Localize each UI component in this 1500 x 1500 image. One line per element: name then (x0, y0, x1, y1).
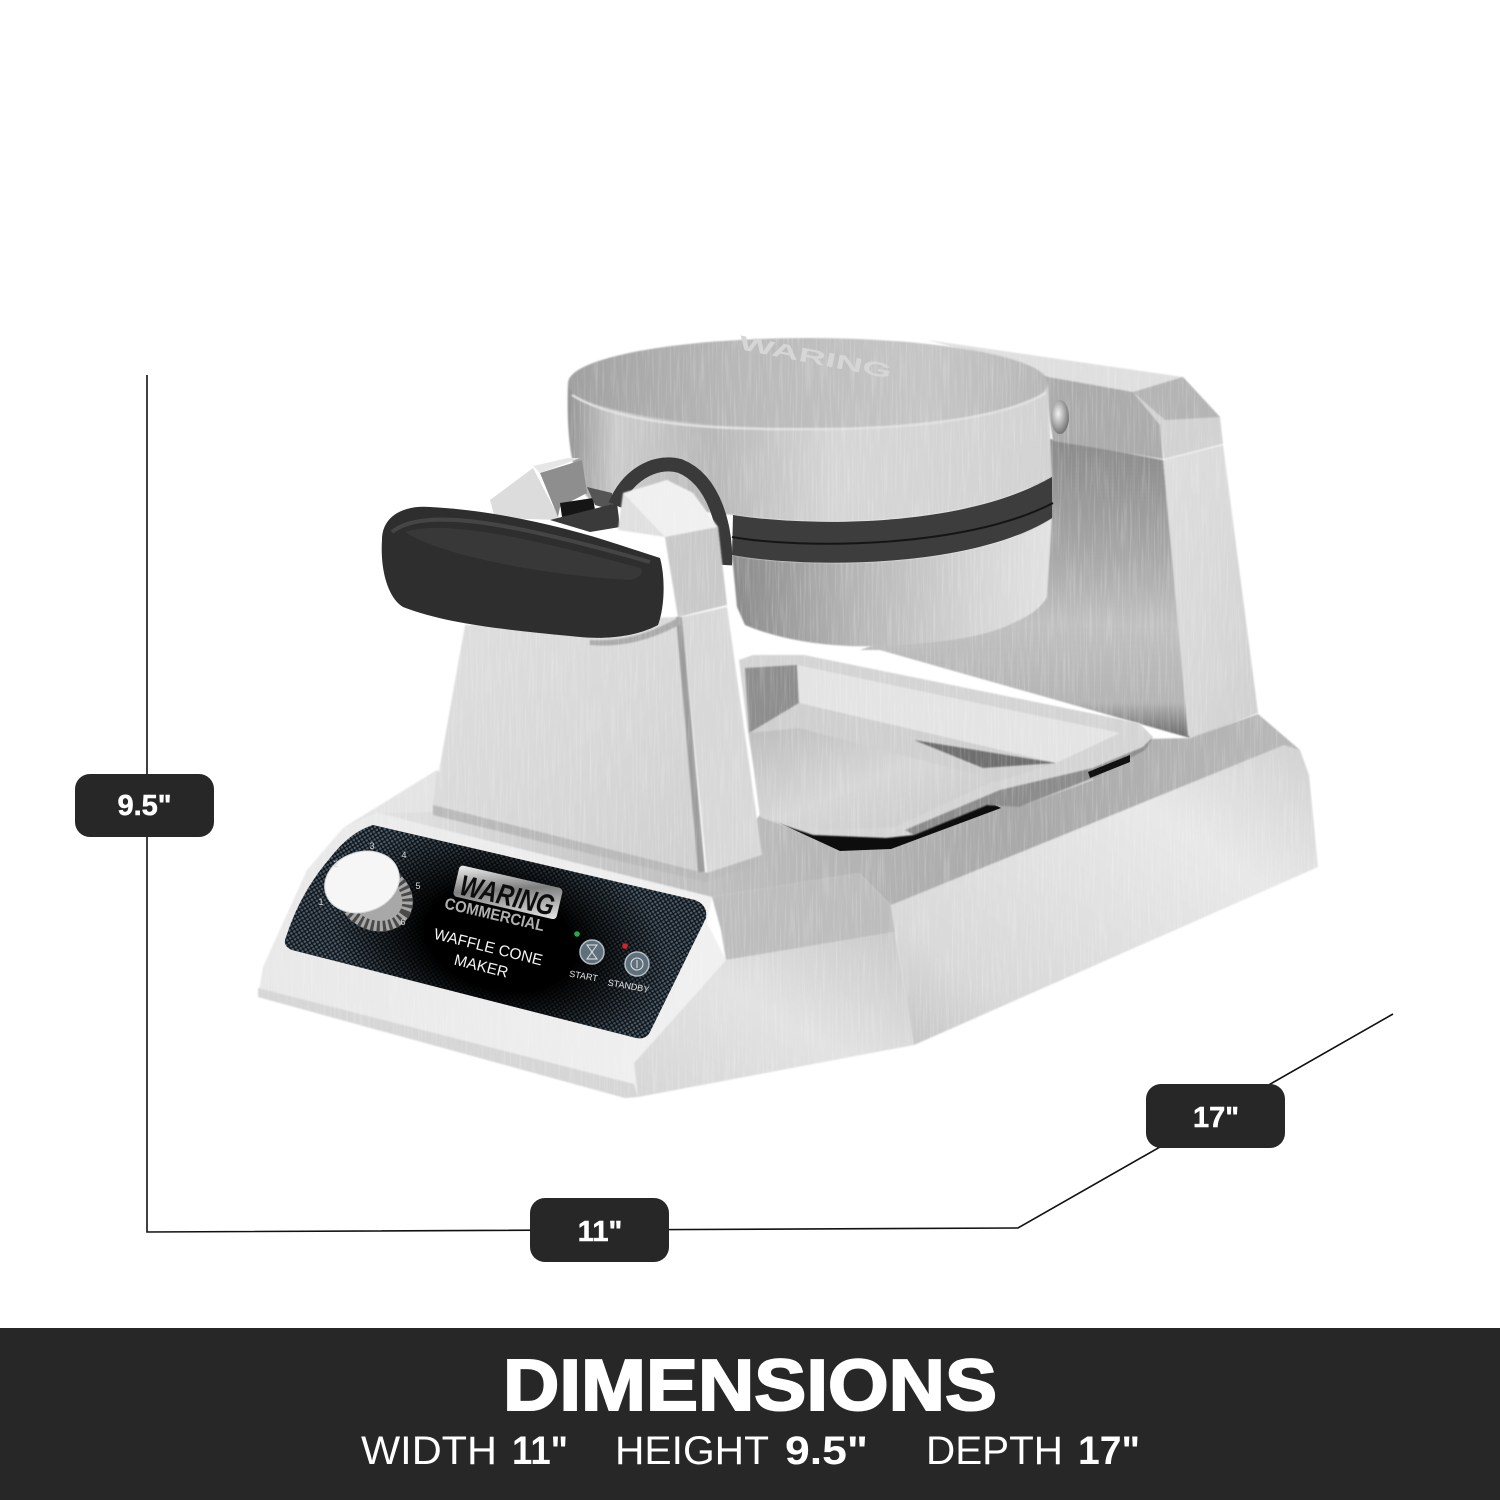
label: width: 11" (578, 1216, 622, 1248)
tray rim (739, 655, 1153, 838)
hourglass icon (587, 945, 597, 959)
back tower column (1163, 445, 1258, 738)
handle mount lip (590, 617, 681, 646)
logo (443, 863, 563, 937)
tray lower wall (749, 703, 1056, 782)
footer specs: DEPTH (926, 1429, 1063, 1473)
tray reflection (914, 740, 1056, 768)
base corner lower facet (634, 932, 914, 1097)
front post arm (618, 480, 727, 617)
rear post face (490, 468, 560, 520)
footer title: DIMENSIONS (503, 1346, 997, 1426)
panel dark center (340, 836, 660, 1032)
front post side face (682, 607, 762, 873)
tray body (739, 655, 1153, 838)
dial numbers: 2 (333, 859, 339, 869)
tray left inner wall (745, 665, 799, 733)
handle (382, 507, 664, 638)
front post crease (676, 617, 705, 872)
label: height (75, 774, 214, 837)
product: waffle cone maker (258, 332, 1318, 1098)
red led (622, 943, 628, 949)
lower shell (732, 518, 1052, 646)
product name: MAKER (452, 952, 510, 982)
base right face (891, 745, 1318, 1045)
rear post latch (560, 498, 595, 517)
base front face (258, 813, 726, 1098)
front post main face (433, 617, 700, 872)
footer band (0, 1328, 1500, 1500)
head shoulder highlight (572, 393, 1046, 429)
rear post top sliver (533, 458, 580, 473)
base corner upper band (712, 873, 895, 960)
label: height: 9.5" (117, 790, 172, 822)
standby button: STANDBY (607, 977, 650, 995)
base bottom lip (258, 988, 638, 1098)
rear post side (540, 460, 587, 517)
head top disc (568, 338, 1048, 428)
rear left post (490, 458, 620, 532)
handle recess (405, 528, 642, 580)
footer specs: 17" (1078, 1429, 1140, 1473)
knob (317, 842, 425, 944)
dial numbers (318, 841, 421, 927)
head shells (568, 338, 1052, 646)
tray handle (905, 737, 1153, 835)
hinge ring (615, 464, 725, 565)
front post skirt (433, 805, 765, 882)
base left top facet (343, 770, 437, 828)
front post (433, 480, 765, 882)
handle top rim (392, 520, 650, 562)
dial numbers: 4 (401, 850, 407, 860)
logo plate (453, 865, 563, 920)
green led (574, 931, 580, 937)
product name: WAFFLE CONE (432, 926, 544, 969)
back tower inner wall (860, 438, 1190, 738)
back tower cap outer face (1133, 377, 1223, 459)
tray back wall (797, 665, 1120, 763)
base (258, 714, 1318, 1098)
footer specs: 11" (512, 1429, 568, 1473)
footer specs: 9.5" (785, 1429, 868, 1473)
dial numbers: 1 (318, 897, 324, 907)
hinge pin (1051, 400, 1069, 434)
standby button (607, 943, 650, 995)
dial numbers: 3 (369, 841, 375, 851)
back tower cap top (927, 340, 1183, 392)
dial numbers: 5 (415, 881, 421, 891)
start button: START (569, 969, 599, 984)
base top surface (343, 714, 1300, 905)
head band (732, 477, 1052, 563)
tray floor (749, 728, 996, 830)
footer specs (361, 1429, 1140, 1473)
dimension lines (147, 375, 1393, 1232)
control panel (284, 825, 706, 1038)
knob side (325, 850, 425, 944)
back tower cap inner face (1043, 376, 1163, 459)
embossed logo: WARING (737, 332, 893, 383)
back tower (860, 340, 1258, 738)
label: depth (1146, 1084, 1285, 1148)
label: width (530, 1198, 669, 1262)
drip tray (739, 655, 1153, 851)
panel background (285, 825, 706, 1038)
dial numbers: 6 (400, 917, 406, 927)
power icon (631, 958, 643, 970)
label: depth: 17" (1193, 1102, 1239, 1134)
tray shadow (762, 800, 1001, 851)
upper shell (568, 383, 1052, 522)
knob top (317, 842, 407, 922)
footer specs: WIDTH (361, 1429, 497, 1473)
waffle head (568, 332, 1053, 646)
start button (569, 931, 604, 984)
logo wordmark: WARING (457, 870, 557, 923)
tray slot (1088, 755, 1130, 778)
footer specs: HEIGHT (615, 1429, 769, 1473)
logo subtitle: COMMERCIAL (443, 896, 546, 935)
